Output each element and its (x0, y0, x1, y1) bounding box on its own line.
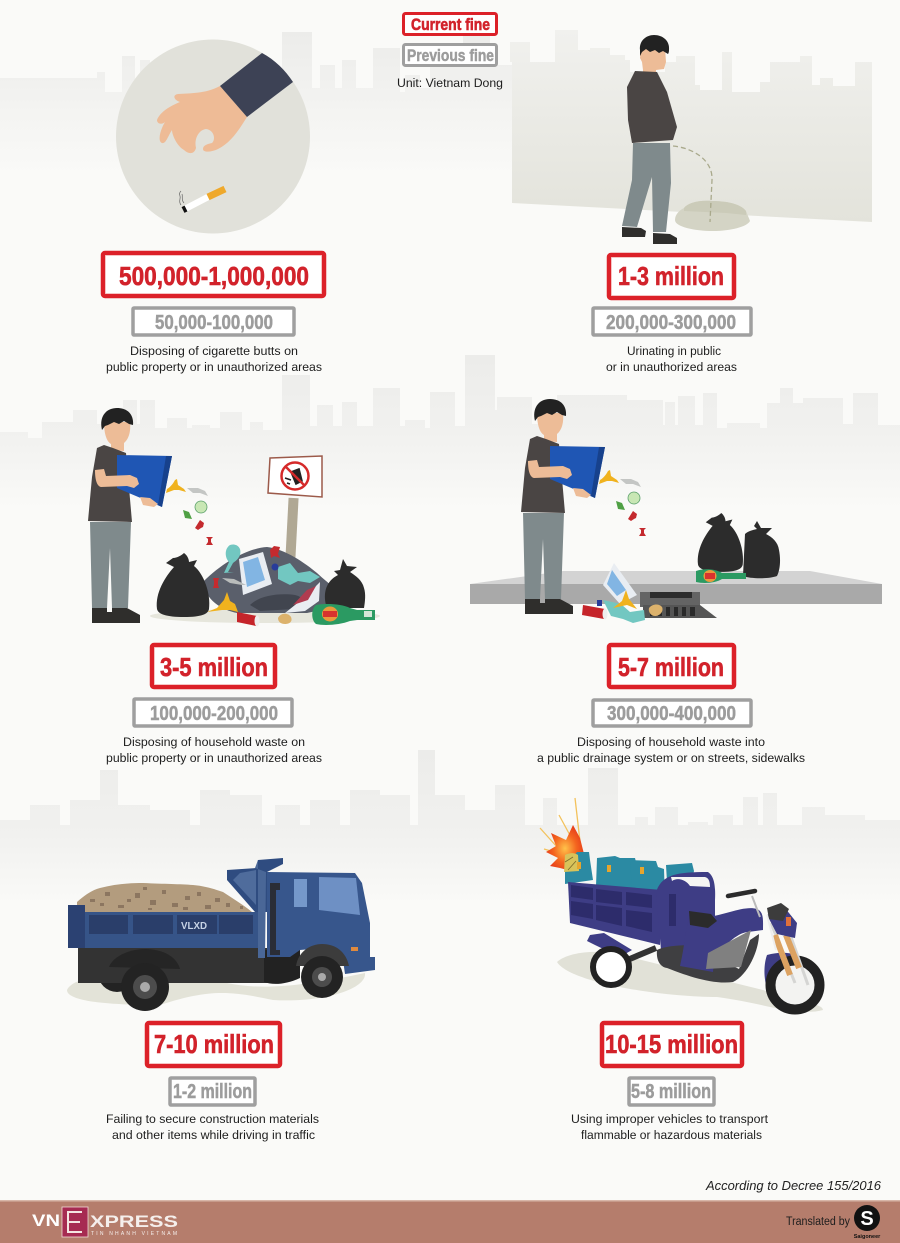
logo: VnExpress: VN (32, 1211, 60, 1230)
current fine: 5-7 million: 5-7 million (618, 652, 724, 682)
description: Using improper vehicles to transport (571, 1112, 769, 1126)
translator credit: Translated by (786, 1216, 850, 1228)
skyline: top band (0, 32, 512, 175)
description: Disposing of household waste into (577, 735, 765, 749)
current fine: 500,000-1,000,000 (103, 253, 324, 296)
legend: current fine: Current fine (411, 15, 490, 34)
previous fine: 100,000-200,000: 100,000-200,000 (150, 703, 278, 725)
panel: transporting hazardous materials (540, 798, 823, 1142)
panel: urinating in public (510, 30, 872, 374)
current fine: 3-5 million (152, 645, 275, 687)
previous fine: 5-8 million (629, 1078, 714, 1105)
previous fine: 200,000-300,000: 200,000-300,000 (606, 312, 736, 334)
illustration: man urinating against wall (510, 30, 872, 244)
description: Urinating in public (627, 344, 721, 358)
legend: previous fine: Previous fine (407, 46, 494, 65)
description: or in unauthorized areas (606, 360, 737, 374)
current fine: 7-10 million (147, 1023, 280, 1066)
panel: cigarette butts (103, 40, 324, 374)
description: public property or in unauthorized areas (106, 751, 322, 765)
previous fine: 5-8 million: 5-8 million (631, 1081, 711, 1103)
panel: unsecured construction materials (67, 858, 375, 1142)
current fine: 1-3 million: 1-3 million (618, 261, 724, 291)
illustration: man dumping waste into street drain (470, 399, 882, 623)
description: public property or in unauthorized areas (106, 360, 322, 374)
description: Failing to secure construction materials (106, 1112, 319, 1126)
skyline: lower band (0, 750, 900, 905)
previous fine: 300,000-400,000: 300,000-400,000 (607, 703, 736, 725)
skyline: middle band (0, 355, 900, 510)
translator credit: Saigoneer (854, 1234, 881, 1240)
truck label: VLXD (181, 921, 207, 932)
legend (397, 14, 503, 90)
illustration: man dumping waste at no-littering sign (88, 408, 380, 626)
source note: According to Decree 155/2016 (705, 1179, 881, 1193)
logo: VnExpress: TIN NHANH VIETNAM (91, 1231, 177, 1237)
previous fine: 50,000-100,000: 50,000-100,000 (155, 312, 273, 334)
previous fine: 1-2 million (170, 1078, 255, 1105)
illustration: hand dropping cigarette (116, 40, 310, 234)
current fine: 7-10 million: 7-10 million (154, 1029, 274, 1059)
illustration: motor tricycle with gas cylinders (540, 798, 823, 1012)
description: and other items while driving in traffic (112, 1128, 315, 1142)
previous fine: 50,000-100,000 (133, 308, 294, 335)
current fine: 1-3 million (609, 255, 734, 298)
panel: household waste on public property (88, 408, 380, 765)
previous fine: 1-2 million: 1-2 million (173, 1081, 252, 1103)
description: Disposing of household waste on (123, 735, 305, 749)
current fine: 5-7 million (609, 645, 734, 687)
current fine: 10-15 million: 10-15 million (605, 1029, 738, 1059)
current fine: 500,000-1,000,000: 500,000-1,000,000 (119, 261, 309, 291)
current fine: 10-15 million (602, 1023, 742, 1066)
translator credit (786, 1205, 881, 1240)
logo: VnExpress: XPRESS (90, 1212, 178, 1231)
description: Disposing of cigarette butts on (130, 344, 298, 358)
legend: unit: Unit: Vietnam Dong (397, 76, 503, 90)
description: flammable or hazardous materials (581, 1128, 762, 1142)
logo: VnExpress (32, 1207, 178, 1237)
current fine: 3-5 million: 3-5 million (160, 652, 268, 682)
footer bar (0, 1200, 900, 1243)
translator credit: S (860, 1208, 874, 1230)
panel: household waste into drainage (470, 399, 882, 765)
illustration: dump truck (67, 858, 375, 1011)
description: a public drainage system or on streets, sidewalks (537, 751, 805, 765)
previous fine: 100,000-200,000 (134, 699, 292, 726)
